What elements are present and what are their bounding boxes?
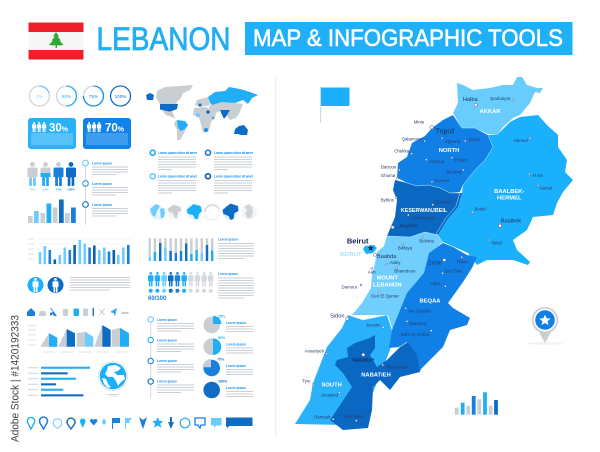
text blocks with circular markers: Lorem ipsum dolor sit amet [214,151,254,155]
town names: Bar Elias [445,269,463,274]
town names: Jounieh [398,224,418,230]
horizontal bar chart [28,367,90,396]
capital star marker [368,245,374,251]
people row with 60/100 statistic [148,272,254,302]
divider [275,77,276,437]
region names: KESERWANJBEIL [401,208,448,214]
timeline with three items: Lorem Ipsum [92,162,112,166]
people percentage icons [28,162,76,192]
timeline with four items: Lorem Ipsum [157,318,177,322]
town names: Sidon [330,314,344,320]
town names: Dahr El Ahmar [401,332,430,337]
town names: Bcharré [446,169,462,174]
town names: Chekka [394,148,410,153]
pie charts 25 to 100 percent: Lorem Ipsum [226,342,246,346]
stat card 30%: 30% [49,122,69,134]
region names: SOUTH [322,382,342,388]
people row with 60/100 statistic: 60/100 [148,296,167,302]
region names: HERMEL [497,196,522,202]
region: Beirut [363,245,377,254]
region: North [397,115,493,193]
town names: Anjar [430,281,441,286]
timeline with four items [148,317,194,398]
town names: Damour [341,284,358,289]
town markers [312,100,539,422]
region: Akkar [453,77,543,135]
town names: Qaraoun [409,321,427,326]
town names: Douma [435,178,450,183]
progress donuts: 50% [62,94,71,99]
town names: Marjayoun [386,364,408,369]
progress donuts: 0% [36,94,43,99]
town names: Al Bathrunah [410,216,436,221]
town names: Qoubaiyat [490,96,511,101]
town names: Amioun [429,159,445,164]
town names: Nabatiye [352,357,374,363]
people percentage icons: 50% [42,188,49,192]
town names: Aah [368,269,376,274]
town names: Al Ain [532,173,544,178]
row of globes [149,204,257,220]
bar chart 1 [28,200,76,223]
town names: Baalbek [501,219,521,225]
region: South [295,315,392,425]
region: Keserwan-Jbeil [387,180,462,237]
town names: Deir El Qamar [371,294,399,299]
region: Nabatieh [330,335,420,430]
timeline with three items [83,160,128,225]
town names: Qattin [468,137,481,142]
pie charts 25 to 100 percent: 100% [218,380,228,384]
stat card 70%: 70% [105,122,125,134]
town names: Bodai [474,207,486,212]
pie charts 25 to 100 percent: 25% [218,314,226,318]
town names: Hermel [514,138,528,143]
progress donuts: 100% [115,94,126,99]
column chart with gridlines [28,239,132,264]
world map [146,85,258,140]
town names: Ansariyeh [305,348,325,353]
pie charts 25 to 100 percent: Lorem Ipsum [226,321,246,325]
region borders [348,115,493,330]
people percentage icons: 25% [29,188,36,192]
town names: Ehden [454,158,468,163]
town names: Bhamdoun [394,268,416,273]
town names: Jouaiyed [321,393,339,398]
map of Lebanon [295,77,573,430]
town names: Jezzine [366,323,381,328]
region names: AKKAR [480,109,501,115]
town names: Tyre [302,379,311,384]
town names: Bint Jbeil [345,414,363,419]
town names: Beirut [347,236,369,246]
title: Lebanon: LEBANON [96,21,230,57]
pie charts 25 to 100 percent: 50% [218,336,226,340]
stock image identifier: Adobe Stock | #1420192333 [10,315,22,442]
text blocks with circular markers: Lorem ipsum dolor sit amet [158,174,198,178]
globe icon [98,362,128,396]
town names: Bikfaya [398,246,413,251]
people row with 60/100 statistic: Lorem Ipsum [218,272,238,276]
mini bar chart [455,392,498,415]
banner: map and infographic tools: MAP & INFOGRAPHIC TOOLS [253,25,563,52]
town names: Ain Zebdeh [408,308,431,313]
town names: Britel [492,241,502,246]
town names: Byblos [381,198,395,203]
region names: LEBANON [373,283,402,289]
pie charts 25 to 100 percent: Lorem Ipsum [226,364,246,368]
pie charts 25 to 100 percent [203,314,253,398]
text blocks with circular markers: Lorem ipsum dolor sit amet [214,174,254,178]
icon set: pins, flags, star and speech bubbles [27,417,252,429]
town names: Zahle [428,261,442,267]
icon row: transport and places [27,308,129,316]
region names: BEQAA [420,298,441,304]
town names: Aarsal [539,186,552,191]
pie charts 25 to 100 percent: Lorem Ipsum [226,386,246,390]
town names: Qalamoun [402,136,422,141]
text blocks with circular markers: Lorem ipsum dolor sit amet [158,151,198,155]
region names: NORTH [439,148,459,154]
striped column chart: Lorem Ipsum [218,238,238,242]
timeline with four items: Lorem Ipsum [157,359,177,363]
flag of Lebanon [28,22,84,60]
striped column chart [148,238,254,261]
region: Mount Lebanon [352,232,443,330]
timeline with four items: Lorem Ipsum [157,338,177,342]
town names: Riyaq [457,259,468,264]
male and female circles [28,277,130,293]
region names: BAALBEK- [494,189,524,195]
town names [302,96,552,419]
region names: MOUNT [377,276,398,282]
town names: Minie [414,120,425,125]
town names: Halba [463,97,478,103]
stat card 30% [28,118,76,149]
timeline with three items: Lorem Ipsum [92,182,112,186]
town names: Batroun [381,165,397,170]
timeline with three items: Lorem Ipsum [92,203,112,207]
town names: Zgharta [445,139,461,144]
stat card 70% [83,118,131,149]
pie charts 25 to 100 percent: 75% [217,358,225,362]
progress donuts: 75% [89,94,98,99]
text blocks with circular markers [150,150,254,193]
region names: NABATIEH [361,373,391,379]
region: Baalbek-Hermel [438,115,573,265]
area chart [28,325,129,352]
town names: Ghuma [381,173,396,178]
progress donuts [30,86,130,106]
region names: BEIRUT [340,252,362,258]
town names: Baabda [377,254,397,260]
town names: Ramyah [314,414,331,419]
town names: Qortaba [435,199,451,204]
region names [322,109,524,388]
town names: Tripoli [436,128,455,136]
town names: Bekinta [419,238,435,243]
location pin with star [527,307,563,345]
town names: Aaley [390,260,401,265]
people percentage icons: 75% [55,188,62,192]
flag icon [320,87,350,123]
people percentage icons: 100% [67,188,75,192]
timeline with four items: Lorem Ipsum [157,380,177,384]
region: Beqaa [389,243,477,372]
